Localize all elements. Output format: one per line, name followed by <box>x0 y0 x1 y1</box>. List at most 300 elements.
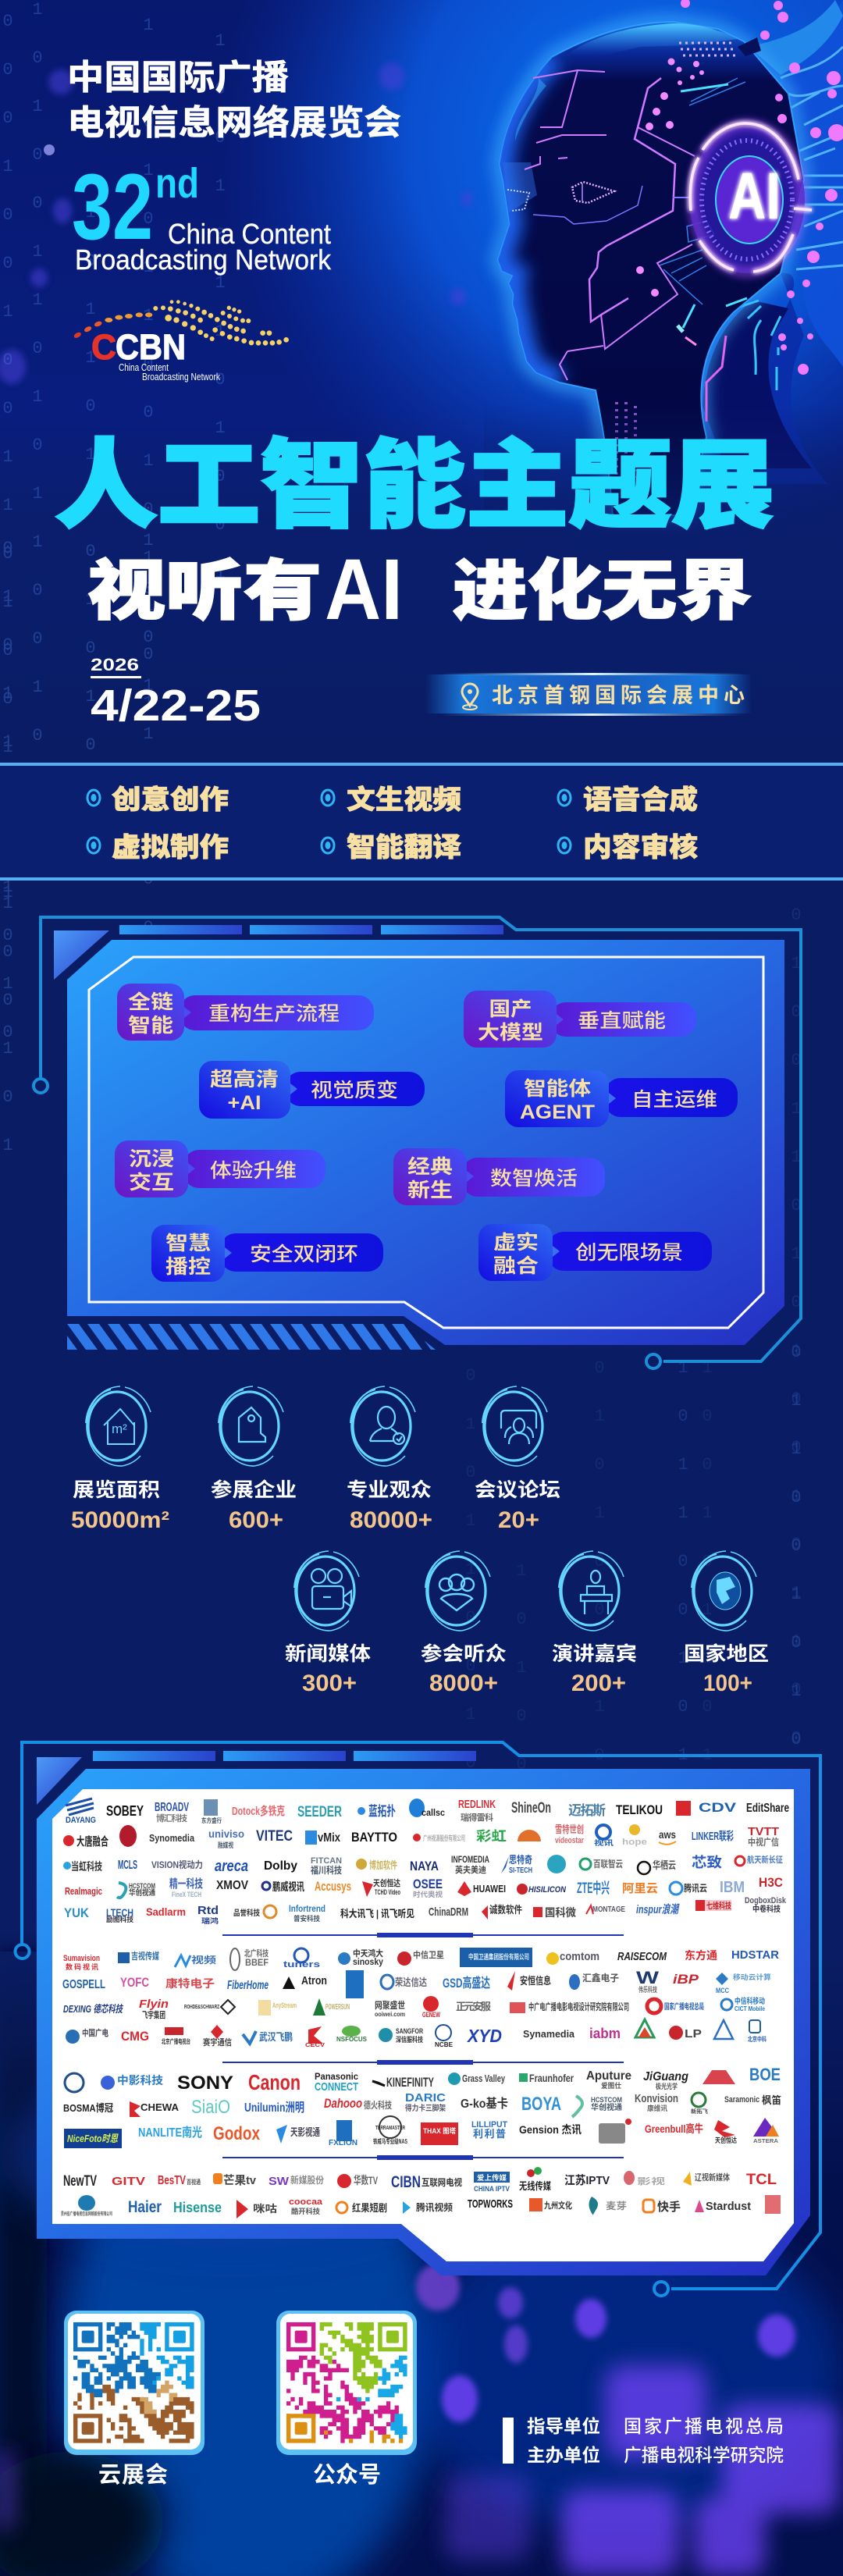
tag: 超高清+AI <box>199 1061 425 1119</box>
logos row 14: 麦芽 <box>606 2200 627 2211</box>
logos row 8: 国家广播电视总局 <box>664 2001 704 2012</box>
logos row 6: RAISECOM <box>617 1950 667 1963</box>
event name heading: 中国国际广播 <box>67 59 289 97</box>
logos row 4: HISILICON <box>528 1885 567 1895</box>
logos row 10: CONNECT <box>315 2080 358 2094</box>
logos row 6: Sumavision <box>63 1954 100 1963</box>
tag: 超高清+AI: 视觉质变 <box>311 1080 398 1101</box>
tag: 国产大模型 <box>464 991 696 1048</box>
logos row 14: 快手 <box>657 2200 681 2214</box>
tag: 沉浸交互: 体验升维 <box>210 1160 297 1182</box>
logos row 10: JiGuang <box>643 2070 688 2083</box>
logos row 4: 精一科技 <box>169 1877 203 1891</box>
logos row 7: GSD高盛达 <box>443 1975 490 1991</box>
logos row 3: FITCAN <box>311 1856 342 1866</box>
logos row 3 <box>63 1854 783 1876</box>
logos row 1: 迈拓斯 <box>568 1802 606 1818</box>
tag: 全链智能: 智能 <box>128 1015 173 1037</box>
logos row 2: vMix <box>318 1831 340 1845</box>
logos row 5: 国科微 <box>545 1906 576 1919</box>
background binary code rain: 1 0 0 1 0 1 1 0 1 0 0 1 1 0 1 0 1 <box>698 1358 717 2157</box>
tag: 超高清+AI: 超高清 <box>210 1069 279 1091</box>
stat: 展览面积: 50000m² <box>71 1507 169 1533</box>
logos row 6: 视频 <box>191 1954 216 1966</box>
logos row 12: NiceFoto时恩 <box>67 2133 119 2144</box>
logos row 3: 英夫美迪 <box>455 1864 486 1875</box>
logos row 3: INFOMEDIA <box>451 1854 489 1865</box>
tag: 智能体AGENT: AGENT <box>520 1101 595 1123</box>
logos row 12: FXLION <box>329 2139 357 2147</box>
stat: 新闻媒体 <box>285 1551 371 1696</box>
stat: 参展企业 <box>211 1386 297 1533</box>
logos row 10: Fraunhofer <box>529 2072 574 2084</box>
tag: 经典新生: 经典 <box>407 1156 453 1178</box>
logos row 9: 北京中科 <box>748 2035 767 2043</box>
32nd edition mark: China Content <box>168 218 331 250</box>
logos row 11: Unilumin洲明 <box>244 2101 304 2115</box>
logos row 10: 中影科技 <box>117 2074 163 2087</box>
background binary code rain: 1 0 0 1 0 1 1 0 1 0 0 1 <box>211 31 229 588</box>
logos row 4: TCHD Video <box>375 1888 400 1896</box>
logos row 4: 时代奥视 <box>413 1890 443 1898</box>
logos row 5: 七维科技 <box>706 1900 731 1911</box>
tag: 智能体AGENT <box>505 1070 738 1127</box>
location badge: 北京首钢国际会展中心 <box>492 684 745 707</box>
background binary code rain: 1 0 1 0 0 1 1 0 1 <box>512 1561 531 1973</box>
logos row 9: 北京广播电视台 <box>162 2037 190 2045</box>
logos row 1: 博汇科技 <box>156 1813 187 1823</box>
logos row 14: 贵州省广播电视信息网络股份有限公司 <box>61 2211 112 2217</box>
logos row 5: DogboxDisk <box>745 1896 787 1905</box>
logos row 8: 中广电广播电影电视设计研究院有限公司 <box>528 2001 629 2012</box>
tag: 超高清+AI: +AI <box>228 1092 261 1114</box>
logos row 4: FineX TECH <box>172 1891 201 1898</box>
logos row 5: Rtd <box>197 1904 219 1917</box>
logos row 14: 咪咕 <box>253 2203 277 2215</box>
logos row 7: W <box>636 1968 659 1987</box>
logos row 13: 百视通 <box>187 2178 201 2186</box>
logos row 2: 视讯 <box>594 1838 614 1847</box>
logos row 10 <box>65 2065 781 2094</box>
logos row 8: 飞宇集团 <box>142 2009 165 2020</box>
32nd edition mark: nd <box>155 160 199 207</box>
logos row 12: 天影视通 <box>290 2126 320 2138</box>
icon: location pin <box>462 684 478 710</box>
logos row 1: BROADV <box>155 1801 189 1814</box>
event name heading <box>67 59 401 142</box>
panel outer circuit line <box>34 917 801 1368</box>
date <box>91 655 261 731</box>
logos row 2: VITEC <box>256 1828 293 1845</box>
logos row 13: 影视 <box>637 2176 665 2186</box>
logos row 3: 福川科技 <box>311 1864 342 1876</box>
background binary code rain: 1 0 0 1 1 0 1 0 0 1 <box>139 531 158 991</box>
logos row 4: 阿里云 <box>622 1882 658 1895</box>
QR label: 云展会: 云展会 <box>98 2462 168 2488</box>
organisers: 国家广播电视总局 <box>624 2416 784 2436</box>
panel body <box>67 940 784 1345</box>
logos row 9: LP <box>685 2027 702 2041</box>
subtitle: AI <box>325 542 403 638</box>
logos row 12: NANLITE南光 <box>138 2126 202 2140</box>
QR label: 公众号: 公众号 <box>313 2462 381 2488</box>
stat: 国家地区: 国家地区 <box>684 1643 769 1665</box>
statistics <box>71 1386 769 1696</box>
logos row 6: 数码视讯 <box>66 1962 98 1971</box>
logos row 9: 赛宇通信 <box>203 2037 232 2048</box>
logos row 9: XYD <box>466 2026 502 2046</box>
logos row 14: Haier <box>128 2198 162 2216</box>
tag: 虚实融合: 创无限场景 <box>575 1242 683 1264</box>
logos row 8: ROHDE&SCHWARZ <box>184 2005 219 2010</box>
logos row 1: Dotock多铁克 <box>232 1804 285 1818</box>
logos row 13 <box>63 2167 777 2193</box>
logos row 11: Saramonic <box>724 2095 759 2105</box>
logos row 4: HUAWEI <box>473 1883 506 1895</box>
logos row 9: NCBE <box>435 2041 454 2048</box>
logos row 3: NAYA <box>410 1859 439 1873</box>
tech details on temple <box>660 78 745 304</box>
stat: 参展企业: 600+ <box>229 1507 283 1533</box>
logos row 9: SANGFOR <box>396 2027 423 2035</box>
logos row 1: 瑞得雷科 <box>461 1812 493 1823</box>
stat: 演讲嘉宾: 演讲嘉宾 <box>552 1643 637 1665</box>
logos row 3: 华栖云 <box>653 1859 676 1871</box>
stat: 参展企业: 参展企业 <box>211 1478 297 1501</box>
logos row 6: 吉视传媒 <box>131 1950 159 1962</box>
logos row 4: XMOV <box>216 1879 248 1892</box>
stat: 新闻媒体: 300+ <box>302 1670 357 1696</box>
logos row 6: 中信卫星 <box>413 1949 444 1960</box>
logos row 1 <box>66 1798 789 1825</box>
logos row 13: BesTV <box>158 2174 186 2187</box>
panel: AI themes <box>34 917 801 1368</box>
organisers: 广播电视科学研究院 <box>624 2445 784 2465</box>
stat: 演讲嘉宾 <box>552 1551 637 1696</box>
logos row 1: SEEDER <box>297 1804 342 1820</box>
tag: 沉浸交互: 沉浸 <box>129 1148 174 1170</box>
logos row 7 <box>62 1968 771 1998</box>
logos row 1: TELIKOU <box>616 1802 663 1817</box>
logos row 9: NSFOCUS <box>336 2036 368 2043</box>
logos row 14: 酷开科技 <box>291 2207 320 2215</box>
logos row 11: 华创视通 <box>591 2102 622 2112</box>
tag: 经典新生 <box>393 1148 605 1205</box>
logos row 4: 华创视通 <box>129 1888 155 1898</box>
mechanical back of head <box>702 0 843 484</box>
logos row 3: VISION视动力 <box>151 1859 203 1870</box>
background binary code rain: 1 0 1 0 0 1 1 0 1 0 1 1 0 0 1 0 1 0 <box>28 0 47 847</box>
logos row 3: 当虹科技 <box>71 1860 102 1873</box>
logos row 4: Accusys <box>315 1879 351 1894</box>
tag: 经典新生: 数智焕活 <box>490 1168 578 1190</box>
logos row 6: 中天鸿大 <box>353 1948 383 1959</box>
organisers: 指导单位 <box>527 2416 600 2436</box>
logos row 4: H3C <box>759 1875 783 1890</box>
logos row 13: CHINA IPTV <box>474 2185 510 2193</box>
logos row 11: DARIC <box>405 2091 446 2105</box>
logos row 12: Godox <box>213 2123 261 2144</box>
tag: 全链智能: 全链 <box>128 991 173 1013</box>
logos row 4: Realmagic <box>65 1885 102 1897</box>
logos row 4: IBM <box>720 1879 745 1896</box>
logos row 11 <box>63 2091 781 2118</box>
stat: 专业观众: 专业观众 <box>347 1479 432 1501</box>
logos row 2 <box>63 1823 779 1849</box>
panel body <box>37 1769 810 2275</box>
logos row 10: 爱图仕 <box>601 2081 621 2090</box>
logos row 8: 网聚盛世 <box>375 1999 405 2011</box>
logos row 11: BOYA <box>521 2094 561 2115</box>
date: 2026 <box>91 655 139 674</box>
logos row 3: areca <box>215 1858 248 1875</box>
logos row 2: 大唐融合 <box>76 1834 108 1848</box>
logos row 11: CHEWA <box>140 2101 180 2113</box>
head silhouette glow <box>498 22 804 515</box>
background binary code rain: 1 0 1 1 0 1 0 0 1 0 1 0 <box>81 203 100 760</box>
inner rim light on face <box>498 57 560 382</box>
logos row 13: 华数TV <box>354 2174 378 2186</box>
logos row 7: YOFC <box>120 1975 149 1990</box>
logos row 5: Sadlarm <box>146 1905 186 1918</box>
subtitle: 视听有 <box>87 554 322 628</box>
logos row 3: 百联智云 <box>593 1858 623 1870</box>
logos row 6: tuners <box>283 1960 320 1969</box>
logos row 5 <box>64 1896 787 1925</box>
logos row 7: GOSPELL <box>62 1978 105 1991</box>
logos row 2: TVTT <box>748 1825 779 1838</box>
logos row 2: videostar <box>555 1836 585 1845</box>
logos row 3: SI-TECH <box>509 1866 532 1875</box>
organisers <box>503 2416 784 2465</box>
logos row 11: 新拓飞 <box>691 2108 708 2115</box>
stat: 演讲嘉宾: 200+ <box>571 1670 626 1696</box>
logos row 14 <box>61 2195 781 2218</box>
tag: 虚实融合 <box>478 1224 712 1281</box>
logos row 4: 鹏威视讯 <box>272 1880 304 1893</box>
logos row 7: MCC <box>716 1987 729 1994</box>
divider lines <box>222 1933 624 2160</box>
logos row 3: 思特奇 <box>509 1854 532 1866</box>
logos row 10: 极光光学 <box>656 2082 678 2090</box>
stat: 新闻媒体: 新闻媒体 <box>285 1643 371 1665</box>
logos row 11: 德火科技 <box>364 2099 392 2111</box>
tag: 虚实融合: 融合 <box>493 1255 539 1277</box>
logos row 10: Aputure <box>586 2069 631 2083</box>
logos row 3: 博加软件 <box>369 1859 397 1871</box>
tag: 沉浸交互: 交互 <box>129 1172 174 1194</box>
logos row 5: 科大讯飞 | 讯飞听见 <box>340 1908 414 1920</box>
CCBN logo: CBN <box>116 327 186 367</box>
AI robot head illustration <box>484 0 843 562</box>
32nd edition mark: 32 <box>72 155 153 259</box>
logos row 5: 诚数软件 <box>489 1904 522 1916</box>
logos row 5: ChinaDRM <box>429 1905 468 1919</box>
logos row 11: SiaiO <box>191 2097 230 2118</box>
logos row 7: FiberHome <box>227 1979 269 1992</box>
logos row 8: ooiwei.com <box>375 2011 405 2018</box>
CCBN logo: C <box>91 327 116 367</box>
logos row 8: GENEW <box>422 2011 440 2019</box>
logos row 13: TCL <box>746 2172 777 2188</box>
logos row 9 <box>66 2019 767 2048</box>
logos row 2: 融媒视 <box>218 1841 233 1849</box>
logos row 9: 中国广电 <box>82 2027 108 2038</box>
logos row 13: 芒果tv <box>223 2174 257 2187</box>
logos row 8: Flyin <box>139 1998 169 2011</box>
stat: 展览面积 <box>71 1386 169 1533</box>
logos row 4: 天创恒达 <box>373 1877 400 1888</box>
logos row 2: hope <box>622 1838 647 1847</box>
tag: 全链智能 <box>117 984 374 1041</box>
logos row 12: Greenbull高牛 <box>645 2122 703 2135</box>
temple dot matrix <box>679 43 738 55</box>
logos row 11: 枫笛 <box>762 2094 781 2106</box>
temple dots <box>636 58 704 297</box>
logos row 10: BOE <box>749 2065 781 2084</box>
event name heading: 电视信息网络展览会 <box>67 104 401 142</box>
stat: 参会听众: 参会听众 <box>421 1642 507 1665</box>
logos row 11: BOSMA博冠 <box>63 2102 113 2114</box>
logos row 14: TOPWORKS <box>468 2197 513 2211</box>
panel: exhibitors logo wall <box>16 1742 820 2296</box>
logos row 5: 励图科技 <box>106 1915 133 1923</box>
white logo sheet <box>52 1789 794 2261</box>
feature band <box>0 763 843 881</box>
stat: 展览面积: 展览面积 <box>73 1479 160 1501</box>
background binary code rain: 0 1 0 1 1 0 0 1 0 1 0 1 0 1 1 <box>461 1366 481 2068</box>
main title: 人工智能主题展 <box>55 432 774 540</box>
logos row 13: 无线传媒 <box>519 2180 551 2192</box>
logos row 3: Dolby <box>264 1859 297 1873</box>
AI ring emblem: AI <box>728 159 781 233</box>
logos row 8: CICT Mobile <box>735 2005 765 2012</box>
tag: 国产大模型: 垂直赋能 <box>578 1010 666 1032</box>
logos row 4: HCSTCOM <box>129 1882 155 1890</box>
logos row 6: sinosky <box>353 1956 383 1967</box>
logos row 13: GITV <box>112 2175 145 2188</box>
logos row 5: YUK <box>64 1905 90 1920</box>
logos row 5: Infortrend <box>289 1903 325 1914</box>
background binary code rain: 1 0 1 1 0 0 1 0 1 0 1 1 0 0 1 0 1 <box>673 1358 693 2157</box>
tag: 国产大模型: 国产 <box>489 998 532 1020</box>
stat: 国家地区 <box>684 1551 769 1696</box>
tag: 智慧播控 <box>151 1225 383 1282</box>
logos row 13: 新媒股份 <box>290 2174 324 2186</box>
logos row 12: 铁威马专业级NAS <box>373 2137 407 2145</box>
tag: 沉浸交互 <box>115 1140 325 1197</box>
logos row 13: 爱上传媒 <box>477 2173 507 2182</box>
feature band: 虚拟制作 <box>112 833 229 863</box>
logos row 4: ZTE中兴 <box>577 1880 610 1897</box>
logos row 11: 康维讯 <box>647 2104 667 2112</box>
logos row 2: Synomedia <box>149 1832 195 1844</box>
logos row 1: EditShare <box>746 1802 789 1815</box>
logos row 14: 腾讯视频 <box>416 2201 453 2213</box>
stat: 展览面积: m² <box>112 1421 127 1436</box>
logos row 8: POWERSUN <box>325 2003 350 2012</box>
QR code: 公众号 <box>276 2311 417 2455</box>
logos row 9: CECV <box>305 2043 325 2048</box>
logos row 12: TERRAMASTER <box>375 2126 405 2131</box>
logos row 3: 芯致 <box>692 1855 722 1870</box>
subtitle <box>87 542 752 638</box>
logos row 3: MCLS <box>118 1859 137 1872</box>
logos row 13: SW <box>269 2175 290 2188</box>
logos row 7: Atron <box>301 1974 327 1987</box>
logos row 10: Canon <box>248 2070 301 2094</box>
date: 4/22-25 <box>91 681 261 731</box>
AI ring emblem <box>689 123 812 273</box>
location badge <box>425 673 752 716</box>
feature band: 语音合成 <box>583 785 698 815</box>
logos row 9: iabm <box>589 2026 621 2041</box>
feature band: 内容审核 <box>583 832 698 863</box>
background binary code rain: 0 1 0 1 0 0 1 1 0 1 0 0 1 1 0 1 0 <box>590 1358 609 2157</box>
logos row 1: REDLINK <box>458 1798 496 1811</box>
logos row 5: 中卷科技 <box>752 1904 781 1914</box>
logos row 11: 得力卡三脚架 <box>405 2103 446 2113</box>
logos row 6: 北广科技 <box>244 1948 269 1959</box>
logos row 2: LINKER联彩 <box>692 1830 734 1843</box>
forehead highlight <box>564 23 738 56</box>
logos row 2: 中视广信 <box>748 1836 779 1848</box>
logos row 5: 普安科技 <box>293 1914 320 1923</box>
subtitle: 进化无界 <box>453 554 752 628</box>
CCBN logo: Broadcasting Network <box>142 371 220 382</box>
feature band: 文生视频 <box>347 785 461 815</box>
logos row 7: 汇鑫电子 <box>582 1972 619 1984</box>
tag: 智慧播控: 智慧 <box>165 1233 211 1254</box>
CCBN logo: China Content <box>119 361 169 373</box>
logos row 1: DAYANG <box>66 1816 96 1825</box>
logos row 1: CDV <box>699 1800 737 1815</box>
tag: 全链智能: 重构生产流程 <box>208 1003 340 1025</box>
logos row 9: CMG <box>121 2029 149 2044</box>
head silhouette <box>498 22 804 515</box>
logos row 8: 中信科移动 <box>735 1996 765 2006</box>
logos row 1: ShineOn <box>511 1800 551 1816</box>
tag: 智慧播控: 播控 <box>165 1256 211 1278</box>
circuit lines on face <box>525 70 695 380</box>
logos row 4 <box>65 1875 783 1898</box>
logos row 13: 江苏IPTV <box>564 2174 610 2187</box>
logos row 14: Stardust <box>706 2200 751 2213</box>
tag: 智慧播控: 安全双闭环 <box>250 1244 358 1265</box>
logos row 11: G-ko基卡 <box>461 2097 508 2111</box>
logos row 2: 彩虹 <box>476 1829 507 1844</box>
logos row 14: coocaa <box>289 2197 323 2207</box>
tag: 智能体AGENT: 自主运维 <box>631 1089 717 1111</box>
stat: 会议论坛 <box>475 1386 560 1533</box>
floating dots <box>681 0 843 375</box>
logos row 14: 红果短剧 <box>352 2202 387 2214</box>
logos row 1: 东方盛行 <box>201 1816 222 1824</box>
logos row 13: NewTV <box>63 2173 97 2190</box>
logos row 7: iBP <box>673 1972 699 1987</box>
panel outer circuit line <box>16 1742 820 2296</box>
logos row 14: Hisense <box>173 2200 222 2215</box>
logos row 8 <box>63 1996 765 2020</box>
stat: 会议论坛: 20+ <box>498 1507 539 1533</box>
CCBN logo <box>73 300 289 382</box>
logos row 6: 中国卫通集团股份有限公司 <box>468 1952 529 1961</box>
stat: 参会听众: 8000+ <box>429 1670 498 1696</box>
logos row 3: 航天新长征 <box>747 1854 783 1865</box>
logos row 8: AnyStream <box>272 2001 297 2009</box>
logos row 4: 腾讯云 <box>684 1882 707 1894</box>
tag: 国产大模型: 大模型 <box>478 1022 543 1044</box>
